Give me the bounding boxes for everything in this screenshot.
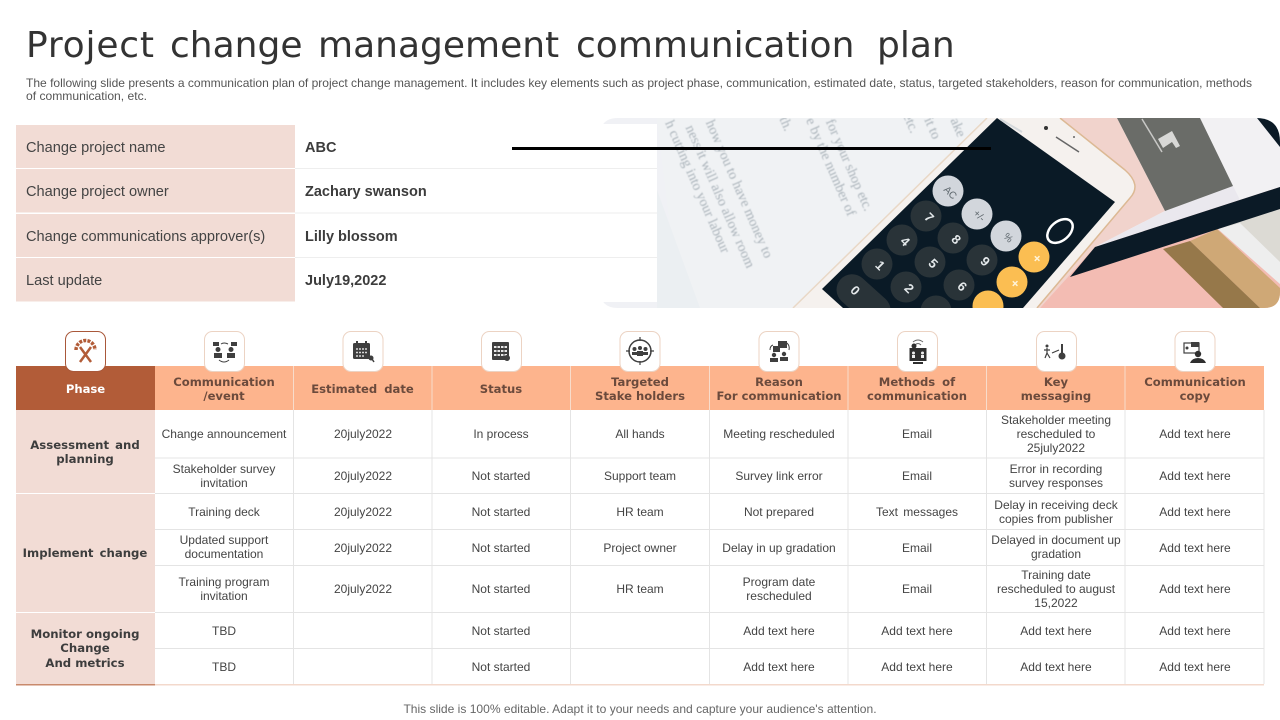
row: change announcement: Stakeholder meeting: [1001, 413, 1111, 427]
row: training program invitation: Not started: [472, 582, 530, 596]
row: stakeholder survey invitation: 20july2022: [334, 469, 392, 483]
phase labels: Change: [60, 641, 110, 655]
calculator keys: +: [1029, 250, 1045, 267]
blurred page text: ness it will also allow room: [682, 123, 757, 271]
row: training deck: Not started: [472, 505, 530, 519]
icon: presenter on screen: [898, 332, 938, 372]
column headers: /event: [203, 389, 245, 403]
row: TBD one: Add text here: [1159, 624, 1231, 638]
blurred page text: e by the number of: [802, 116, 858, 219]
row: change announcement: All hands: [615, 427, 665, 441]
calculator keys: 0: [847, 282, 863, 298]
row: training deck: Delay in receiving deck: [994, 498, 1119, 512]
info row: approvers: Change communications approver(s): [26, 229, 265, 245]
row: training deck: Add text here: [1159, 505, 1231, 519]
column headers: Key: [1044, 375, 1069, 389]
column headers: copy: [1180, 389, 1211, 403]
column headers: Communication: [173, 375, 275, 389]
row: stakeholder survey invitation: survey responses: [1009, 476, 1103, 490]
info row: project name: Change project name: [26, 140, 166, 156]
column headers: communication: [867, 389, 967, 403]
info row: last update: Last update: [26, 273, 102, 289]
row: change announcement: Email: [902, 427, 932, 441]
row: change announcement: 20july2022: [334, 427, 392, 441]
icon: gear and tools: [66, 332, 106, 372]
column headers: Methods of: [879, 375, 956, 389]
row: stakeholder survey invitation: Add text here: [1159, 469, 1231, 483]
row: TBD two: Add text here: [881, 660, 953, 674]
row: updated support documentation: Email: [902, 541, 932, 555]
row: change announcement: Change announcement: [162, 427, 287, 441]
row: TBD two: TBD: [212, 660, 236, 674]
info row: project name: [26, 140, 337, 156]
row: TBD one: Add text here: [1020, 624, 1092, 638]
row: training deck: Training deck: [188, 505, 261, 519]
row: updated support documentation: Add text here: [1159, 541, 1231, 555]
column headers: Targeted: [611, 375, 669, 389]
row: training program invitation: 15,2022: [1034, 596, 1078, 610]
photo: calculator phone on papers: [604, 118, 1280, 308]
column headers: Reason: [755, 375, 803, 389]
row: stakeholder survey invitation: Not started: [472, 469, 530, 483]
phase labels: Implement change: [23, 546, 147, 560]
row: TBD two: Add text here: [1020, 660, 1092, 674]
calculator keys: +/-: [971, 208, 987, 224]
blurred page text: th.: [776, 114, 795, 134]
column headers: Estimated date: [311, 382, 414, 396]
gray and tan papers: [1040, 187, 1280, 308]
row: TBD two: Add text here: [1159, 660, 1231, 674]
title: change: [170, 25, 302, 66]
info row: project owner: Zachary swanson: [305, 184, 427, 200]
row: change announcement: 25july2022: [1027, 441, 1085, 455]
row: TBD two: Add text here: [743, 660, 815, 674]
blurred page text: h cutting into your labour: [661, 118, 732, 256]
calculator keys: 6: [954, 278, 970, 294]
row: updated support documentation: [180, 533, 1231, 561]
row: updated support documentation: 20july2022: [334, 541, 392, 555]
row: stakeholder survey invitation: Error in recording: [1010, 462, 1102, 476]
title: Project: [26, 25, 155, 66]
row: training program invitation: rescheduled to august: [997, 582, 1116, 596]
row: training program invitation: Program date: [743, 575, 816, 589]
phase labels: Monitor ongoing: [31, 627, 139, 641]
info row: approvers: [26, 229, 398, 245]
row: training program invitation: HR team: [616, 582, 664, 596]
subtitle description: [26, 76, 1252, 103]
phase labels: [23, 438, 147, 670]
title: management: [318, 25, 559, 66]
phase labels: planning: [56, 452, 114, 466]
row: training deck: [188, 498, 1231, 526]
blurred page text: how you to have money to: [702, 118, 775, 261]
pen: [1070, 187, 1280, 277]
footer note: This slide is 100% editable. Adapt it to your needs and capture your audience's attention.: [403, 702, 877, 716]
row: change announcement: [162, 413, 1231, 455]
row: stakeholder survey invitation: [173, 462, 1231, 490]
info row: project name: ABC: [305, 140, 337, 156]
phone: [1023, 118, 1134, 308]
row: training program invitation: 20july2022: [334, 582, 392, 596]
calculator keys: [836, 176, 1074, 308]
column headers: For communication: [716, 389, 842, 403]
calculator keys: 2: [901, 280, 917, 296]
blurred page text: for your shop etc.: [822, 117, 875, 214]
row: training deck: copies from publisher: [999, 512, 1113, 526]
row: stakeholder survey invitation: Support team: [604, 469, 676, 483]
title: communication: [576, 25, 854, 66]
column headers: Stake holders: [595, 389, 685, 403]
row: training program invitation: Add text here: [1159, 582, 1231, 596]
blurred page text: it to: [920, 115, 943, 142]
row: TBD two: Not started: [472, 660, 530, 674]
row: updated support documentation: Delayed in document up: [991, 533, 1121, 547]
subtitle description: of communication, etc.: [26, 89, 147, 103]
blurred page text: etc.: [899, 111, 921, 136]
gray label on notebook: [1117, 118, 1233, 211]
row: training program invitation: rescheduled: [746, 589, 812, 603]
column headers: messaging: [1021, 389, 1091, 403]
phase labels: Assessment and: [30, 438, 140, 452]
column headers: [66, 375, 1246, 403]
column headers: Phase: [66, 382, 105, 396]
row: training program invitation: Email: [902, 582, 932, 596]
info row: project owner: Change project owner: [26, 184, 169, 200]
calculator keys: +: [1007, 275, 1023, 292]
row: updated support documentation: Not started: [472, 541, 530, 555]
calculator keys: AC: [941, 184, 959, 202]
calculator keys: 9: [977, 253, 993, 269]
calculator keys: 1: [872, 257, 888, 273]
subtitle description: The following slide presents a communication plan of project change management. It includes key elements such as project phase, communication, estimated date, status, targeted stakeholders, reason for communication, methods: [26, 76, 1252, 90]
icon: stakeholders circle: [620, 332, 660, 372]
icon: presenter copy board: [1175, 332, 1215, 372]
row: TBD one: TBD: [212, 624, 236, 638]
row: change announcement: Meeting rescheduled: [723, 427, 835, 441]
phase column fills: [16, 410, 155, 684]
row: stakeholder survey invitation: invitation: [200, 476, 248, 490]
project info table: [16, 124, 657, 302]
row: stakeholder survey invitation: Survey link error: [735, 469, 823, 483]
calculator keys: 8: [948, 231, 964, 247]
row: training deck: HR team: [616, 505, 664, 519]
icon: calendar with clock: [482, 332, 522, 372]
row: training program invitation: Training date: [1021, 568, 1091, 582]
calculator keys: %: [1001, 231, 1015, 245]
row: training deck: Not prepared: [744, 505, 814, 519]
row: stakeholder survey invitation: Email: [902, 469, 932, 483]
calculator keys: 7: [921, 209, 937, 225]
info row: approvers: Lilly blossom: [305, 229, 398, 245]
row: change announcement: In process: [473, 427, 529, 441]
row: TBD two: [212, 660, 1231, 674]
icon: calendar with search: [343, 332, 383, 372]
plan table: [16, 366, 1264, 686]
row: updated support documentation: gradation: [1031, 547, 1081, 561]
row: training program invitation: [179, 568, 1231, 610]
info row: project owner: [26, 184, 427, 200]
row: change announcement: Add text here: [1159, 427, 1231, 441]
phase labels: And metrics: [45, 656, 125, 670]
calculator keys: 5: [925, 255, 941, 271]
row: training program invitation: invitation: [200, 589, 248, 603]
row: updated support documentation: Project owner: [603, 541, 677, 555]
row: updated support documentation: Delay in up gradation: [722, 541, 836, 555]
notebook page: [1118, 119, 1162, 205]
column headers: Communication: [1144, 375, 1246, 389]
row: change announcement: rescheduled to: [1017, 427, 1096, 441]
black line: [512, 147, 991, 150]
row: training program invitation: Training program: [179, 575, 269, 589]
icon: person and key: [1036, 332, 1076, 372]
header band: [16, 366, 1264, 410]
row: training deck: Text messages: [876, 505, 958, 519]
pink desk: [1038, 118, 1165, 308]
blurred page text: [661, 111, 968, 271]
row: stakeholder survey invitation: Stakeholder survey: [173, 462, 275, 476]
icon: people discussing: [759, 332, 799, 372]
row: TBD one: [212, 624, 1231, 638]
row: TBD one: Add text here: [743, 624, 815, 638]
icon: communication people: [204, 332, 244, 372]
row: updated support documentation: Updated support: [180, 533, 269, 547]
row: training deck: 20july2022: [334, 505, 392, 519]
row: TBD one: Not started: [472, 624, 530, 638]
info row: last update: July19,2022: [305, 273, 386, 289]
info row: last update: [26, 273, 386, 289]
column headers: Status: [480, 382, 522, 396]
calculator keys: 4: [897, 233, 914, 250]
blurred page text: ake: [947, 116, 968, 140]
row: updated support documentation: documentation: [185, 547, 263, 561]
row: TBD one: Add text here: [881, 624, 953, 638]
title: plan: [877, 25, 955, 66]
